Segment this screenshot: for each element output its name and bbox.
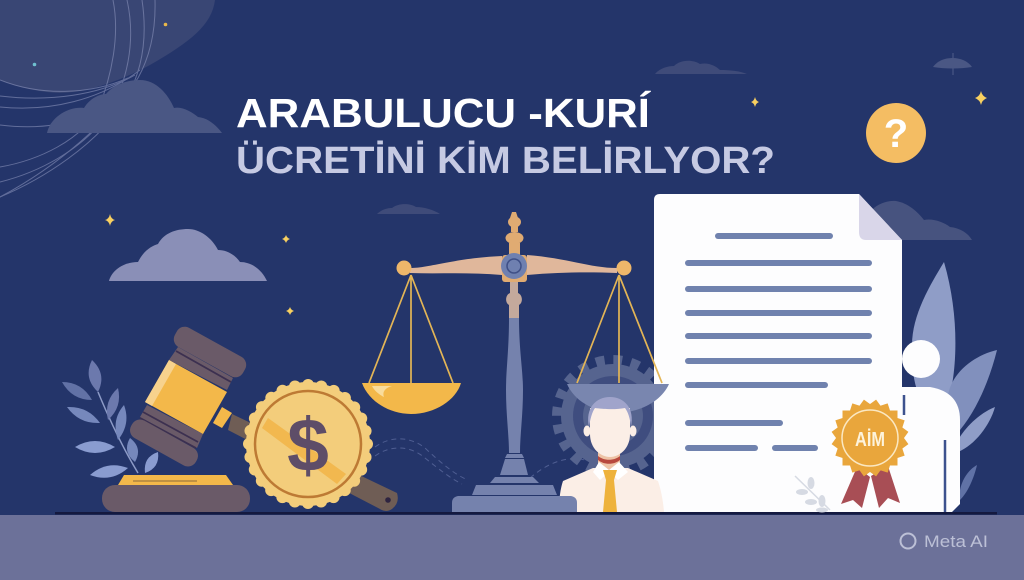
upper band stripes (176, 346, 234, 382)
watermark: Meta AI: Meta AI (924, 532, 988, 551)
icon: gear (557, 360, 669, 472)
small plant (795, 476, 830, 512)
head bottom cap (127, 416, 201, 470)
cloud: small top (655, 61, 747, 74)
title (236, 90, 775, 182)
sparkle: left (105, 214, 115, 226)
right beam end (616, 260, 632, 276)
cloud: small centre (377, 204, 440, 214)
head lower band (140, 405, 203, 448)
shirt (559, 468, 664, 512)
finial (506, 212, 524, 257)
base (102, 485, 250, 512)
collar (593, 462, 628, 480)
ground (0, 515, 1024, 580)
cloud: behind document (870, 201, 972, 240)
cloud: upper left (47, 80, 222, 133)
left pan highlight (372, 386, 392, 397)
dot: gold (164, 23, 167, 26)
sparkle: title right (751, 97, 759, 107)
hair (588, 397, 632, 427)
icon: question mark badge: ? (884, 112, 908, 156)
scale base slab (452, 496, 577, 512)
tie (603, 470, 617, 512)
left beam end (396, 260, 412, 276)
sparkle: far right (975, 91, 987, 105)
head top cap (171, 323, 249, 381)
watermark: Meta AI (900, 532, 988, 551)
strings right (577, 275, 662, 383)
lower band stripes (140, 412, 198, 448)
ground shadow line (55, 512, 997, 514)
document sheet (654, 194, 902, 512)
face (590, 408, 630, 457)
neck (598, 450, 620, 471)
head gold body (145, 360, 227, 434)
strings left (369, 275, 453, 383)
medal (832, 400, 908, 508)
sparkle: lower (286, 307, 294, 315)
small umbrella mark (933, 53, 972, 75)
ribbons (841, 467, 870, 508)
plants behind figure (912, 262, 997, 500)
background blob with orbit lines (0, 0, 215, 197)
neck shadow (598, 456, 620, 464)
scale of justice (362, 212, 669, 495)
base plate (118, 475, 233, 485)
pivot (502, 255, 527, 282)
white figure (902, 340, 960, 512)
title line 2: ÜCRETİNİ KİM BELİRLYOR? (236, 139, 775, 182)
icon: dollar coin (246, 382, 370, 506)
cloud: middle left (109, 229, 267, 281)
beam right arm (527, 255, 617, 275)
folded corner (859, 194, 902, 240)
text lines (688, 236, 869, 448)
plate groove (133, 480, 197, 482)
gavel handle (228, 414, 398, 511)
pivot disc (501, 253, 527, 279)
mediator figure (559, 397, 664, 512)
document (654, 194, 902, 512)
medal: AİM (855, 428, 885, 451)
gavel (102, 323, 398, 512)
title line 1: ARABULUCU -KURÍ (236, 90, 652, 136)
icon: dollar coin: $ (287, 403, 329, 487)
upper base tiers (472, 454, 557, 495)
left pan (362, 383, 461, 414)
column (506, 318, 523, 453)
body highlight (145, 360, 176, 406)
beam left arm (410, 256, 502, 275)
handle end dot (385, 497, 391, 503)
seal (832, 400, 908, 476)
sparkle: middle (282, 235, 290, 243)
right pan (567, 384, 669, 413)
dot: teal (33, 63, 36, 66)
icon: question mark badge (866, 103, 926, 163)
dashed motion lines (375, 439, 585, 484)
column top (506, 282, 522, 318)
collar (213, 407, 232, 428)
ears (584, 426, 590, 436)
head upper band (169, 347, 233, 390)
icon: olive branch (62, 360, 158, 478)
